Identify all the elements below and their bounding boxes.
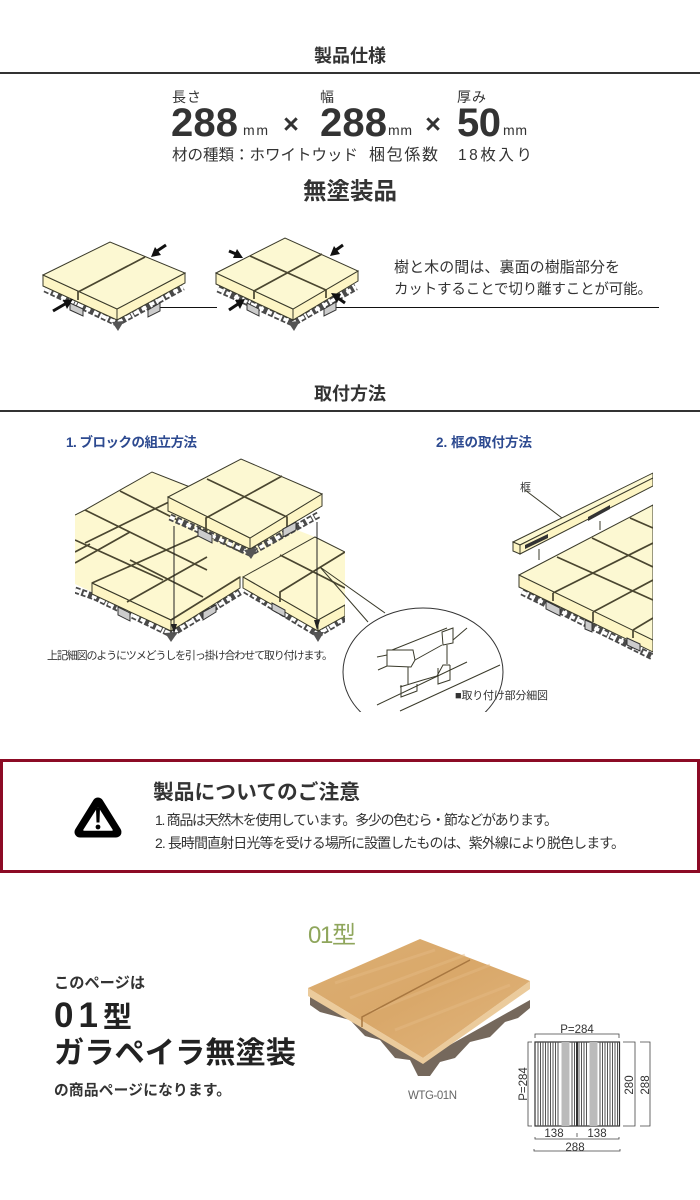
plan drawing with dimensions: 280 [624, 1075, 636, 1095]
cutting explanation text: 樹と木の間は、裏面の樹脂部分を [394, 259, 620, 276]
plan drawing with dimensions: 288 [640, 1075, 652, 1095]
dimensions row: 288 [320, 101, 387, 145]
illustration: frame installation [513, 473, 653, 657]
dimensions row: 幅 [320, 89, 334, 105]
detail caption: ■取り付け部分細図 [455, 688, 548, 702]
lower right tile block [243, 537, 345, 642]
plan drawing with dimensions: 138 [544, 1128, 564, 1140]
cutting explanation text: カットすることで切り離すことが可能。 [394, 281, 652, 298]
lower left tile block [75, 472, 315, 642]
notice heading: 製品についてのご注意 [153, 780, 360, 804]
material and packing text: 材の種類：ホワイトウッド [172, 146, 358, 164]
dimensions row: 長さ [172, 89, 201, 105]
product code: WTG-01N [408, 1090, 457, 1102]
plan drawing with dimensions: 138 [587, 1128, 607, 1140]
dimensions row: mm [503, 122, 527, 138]
product description: の商品ページになります。 [54, 1082, 231, 1099]
notice item 2: 2. 長時間直射日光等を受ける場所に設置したものは、紫外線により脱色します。 [155, 835, 625, 851]
dimensions row: × [425, 109, 441, 139]
dimensions row: 288 [171, 101, 238, 145]
notice item 1: 1. 商品は天然木を使用しています。多少の色むら・節などがあります。 [155, 812, 558, 828]
frame beam [513, 473, 653, 560]
product description [54, 975, 296, 1099]
product type label: 01型 [308, 922, 356, 949]
step 2 title: 2. 框の取付方法 [436, 434, 532, 450]
divider line under tiles [160, 306, 659, 308]
plan drawing with dimensions [518, 1024, 652, 1154]
icon: warning triangle [80, 803, 116, 832]
cutting explanation text [394, 259, 652, 298]
section heading: product specs: 製品仕様 [314, 46, 386, 66]
illustration: four-block tile [216, 238, 358, 331]
arrows down [171, 522, 320, 634]
upper tile block [168, 459, 322, 559]
material and packing text [172, 146, 532, 164]
step 1 title: 1. ブロックの組立方法 [66, 434, 198, 450]
dimensions row: 厚み [457, 89, 486, 105]
plan drawing with dimensions: P=284 [560, 1024, 594, 1036]
frame label: 框 [520, 481, 531, 494]
section heading: installation: 取付方法 [314, 383, 386, 404]
dimensions row [171, 89, 527, 145]
notice panel [2, 760, 698, 872]
dimensions row: 50 [457, 101, 501, 145]
material and packing text: 梱包係数 [369, 146, 438, 164]
plan drawing with dimensions: P=284 [518, 1067, 530, 1101]
illustration: two-slat tile [43, 242, 185, 331]
material and packing text: 18枚入り [458, 146, 532, 164]
product description: 01型 [54, 996, 132, 1035]
dimensions row: mm [388, 122, 412, 138]
product description: ガラペイラ無塗装 [54, 1036, 296, 1070]
unpainted label: 無塗装品 [303, 178, 397, 204]
plan drawing with dimensions: 288 [565, 1142, 585, 1154]
illustration: detail magnifier [320, 566, 504, 712]
illustration: block assembly [75, 459, 345, 642]
assembly caption: 上記細図のようにツメどうしを引っ掛け合わせて取り付けます。 [47, 648, 333, 662]
product description: このページは [54, 975, 145, 992]
dimensions row: mm [243, 122, 268, 138]
product photo: wood tile [308, 939, 530, 1076]
dimensions row: × [283, 109, 299, 139]
